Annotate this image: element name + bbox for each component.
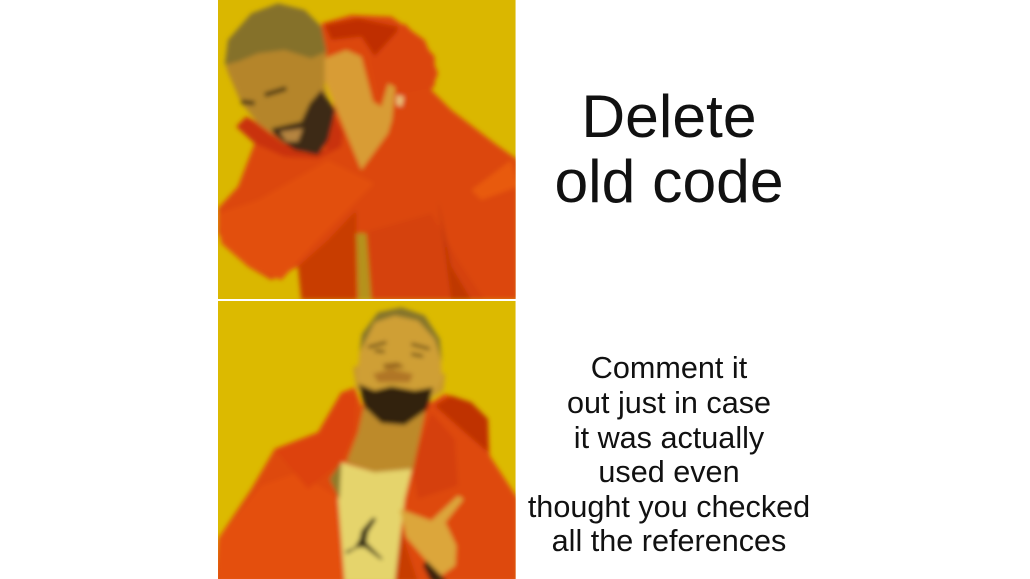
eyes: [368, 342, 430, 356]
jordan logo: [345, 517, 383, 560]
bottom caption: all the references: [552, 524, 786, 558]
bottom caption: out just in case: [567, 386, 771, 420]
bottom caption: [528, 351, 810, 558]
top caption: old code: [554, 147, 784, 215]
beard: [359, 384, 433, 425]
bottom caption: it was actually: [574, 421, 765, 455]
mouth and nose: [373, 369, 413, 382]
panel: bottom image, approving gesture: [215, 299, 518, 579]
brow and eye: [241, 88, 286, 103]
jacket: [215, 387, 518, 579]
panel: top image, rejecting gesture: [218, 0, 518, 300]
hair: [225, 3, 326, 65]
top caption: Delete: [581, 82, 757, 150]
head: [224, 28, 330, 146]
bottom caption: Comment it: [591, 351, 748, 385]
bottom caption: used even: [598, 455, 740, 489]
top caption: [554, 82, 784, 215]
hair: [360, 307, 442, 362]
jacket: [218, 15, 518, 300]
t-shirt: [338, 462, 412, 579]
hood shadow: [325, 18, 398, 57]
ears and head: [353, 366, 365, 396]
cuff: [423, 561, 448, 579]
beard: [271, 90, 335, 155]
hand: [325, 50, 395, 170]
bottom caption: thought you checked: [528, 490, 810, 524]
neck: [346, 399, 428, 472]
collar: [236, 117, 343, 158]
hand: [400, 496, 464, 576]
